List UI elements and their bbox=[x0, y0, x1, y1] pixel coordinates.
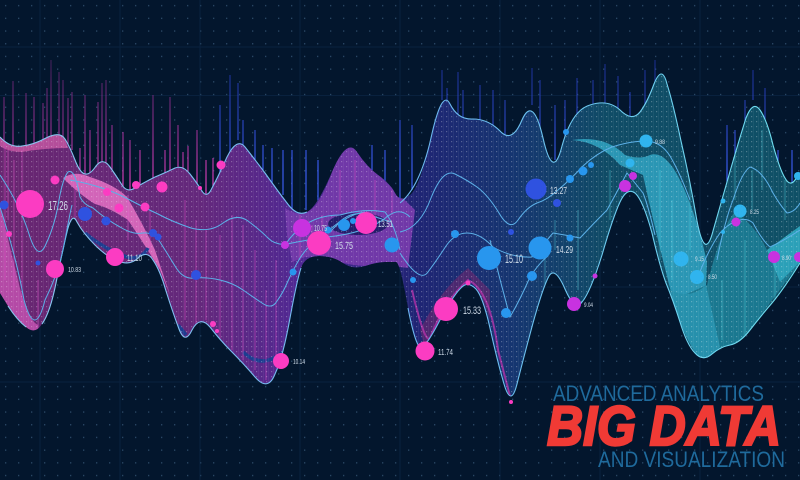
magenta points bbox=[6, 160, 513, 404]
wave body bbox=[0, 74, 800, 396]
fine vertical hatch bbox=[0, 60, 800, 410]
pink band upper left bbox=[0, 135, 68, 152]
light pink diagonal ribbon bbox=[63, 174, 170, 295]
point value labels: 11.74 bbox=[438, 348, 453, 357]
point texture bbox=[0, 60, 800, 410]
point value labels: 15.33 bbox=[463, 305, 481, 317]
lower dip light teal bbox=[670, 285, 720, 362]
magenta inner verticals bbox=[5, 140, 392, 380]
magenta spikes bbox=[4, 60, 213, 195]
point value labels: 9.88 bbox=[655, 140, 666, 146]
cyan points bbox=[626, 134, 800, 284]
coloured ribbons inside the wave bbox=[0, 60, 800, 410]
point value labels: 14.29 bbox=[556, 245, 573, 256]
wave outline bbox=[0, 74, 800, 396]
point value labels: 9.15 bbox=[695, 257, 705, 263]
point value labels: 10.14 bbox=[293, 359, 305, 366]
point value labels: 15.10 bbox=[505, 252, 523, 266]
point value labels: 8.50 bbox=[708, 275, 718, 281]
lower teal body bbox=[687, 214, 800, 350]
lavender section bbox=[285, 147, 415, 268]
inner trend lines bbox=[0, 141, 800, 320]
blue spikes bbox=[220, 60, 792, 210]
point value labels: 8.25 bbox=[750, 210, 760, 216]
point value labels: 13.51 bbox=[378, 219, 393, 229]
point value labels: 13.27 bbox=[550, 186, 567, 197]
violet points bbox=[281, 172, 800, 311]
lower left magenta glow bbox=[420, 268, 490, 348]
cyan ribbon bbox=[572, 139, 707, 300]
point value labels: 10.83 bbox=[68, 267, 81, 274]
title: advanced analytics: ADVANCED ANALYTICS bbox=[553, 381, 764, 406]
cyan inner verticals bbox=[545, 130, 785, 340]
vertical data spikes above the wave bbox=[4, 60, 792, 210]
point value labels: 8.90 bbox=[782, 256, 792, 262]
point value labels: 11.10 bbox=[127, 253, 142, 263]
point value labels bbox=[48, 140, 792, 366]
point value labels: 15.75 bbox=[335, 241, 353, 252]
deep blue points bbox=[0, 178, 561, 280]
point value labels: 10.75 bbox=[314, 224, 327, 233]
title block bbox=[547, 381, 785, 472]
right light cyan strip bbox=[767, 226, 800, 282]
point value labels: 9.04 bbox=[584, 303, 594, 309]
data points bbox=[0, 129, 800, 404]
point value labels: 17.26 bbox=[48, 198, 68, 213]
dark lens bbox=[328, 213, 388, 235]
dark blue ridges bbox=[85, 233, 282, 361]
sky blue points bbox=[290, 129, 594, 318]
pink band lower left bbox=[0, 209, 38, 330]
magenta lower edge bbox=[412, 280, 511, 400]
